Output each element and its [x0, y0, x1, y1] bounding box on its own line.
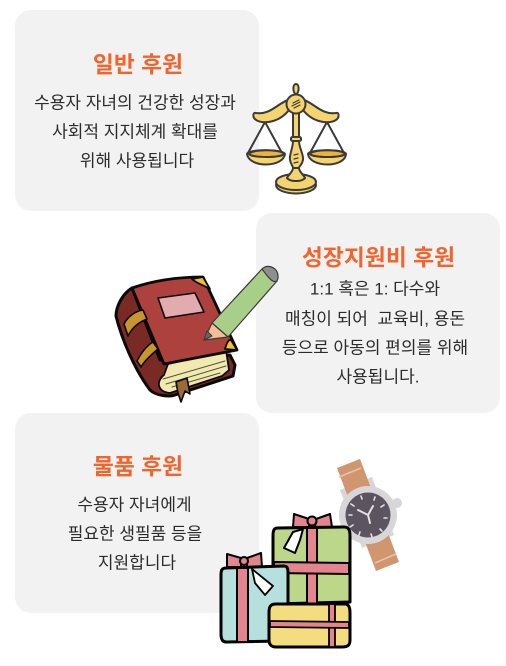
green gift box [273, 514, 350, 604]
book pages [159, 350, 229, 393]
icon: red book with pencil [116, 266, 278, 402]
text block: growth support description: 1:1 혹은 1: 다수와 [310, 280, 440, 298]
panel: goods support [15, 413, 259, 613]
icon: balance scale [247, 84, 346, 194]
heading: growth support: 성장지원비 후원 [302, 245, 455, 271]
pencil [212, 269, 277, 337]
text block: growth support description [282, 280, 468, 386]
text block: growth support description: 매칭이 되어 교육비, 용돈 [285, 310, 465, 328]
text block: goods support description [68, 496, 202, 572]
spine bands [124, 310, 147, 336]
text block: goods support description: 지원합니다 [98, 554, 176, 572]
bookmark [176, 378, 190, 402]
blue gift box [221, 553, 288, 642]
heading: general support: 일반 후원 [93, 52, 183, 78]
icon: gift boxes [221, 514, 350, 647]
text block: growth support description: 사용됩니다. [337, 368, 419, 386]
text block: goods support description: 수용자 자녀에게 [77, 496, 192, 514]
yellow gift box [269, 604, 350, 647]
text block: general support description: 사회적 지지체계 확대를 [52, 122, 218, 142]
cover label [158, 293, 204, 318]
icon: wristwatch [337, 459, 402, 571]
gold corners [192, 277, 210, 289]
text block: goods support description: 필요한 생필품 등을 [68, 524, 202, 544]
text block: growth support description: 등으로 아동의 편의를 위해 [282, 338, 468, 358]
book cover [132, 277, 237, 364]
text block: general support description: 위해 사용됩니다 [80, 152, 194, 170]
panel: growth support [256, 213, 500, 413]
panel: general support [15, 10, 259, 211]
text block: general support description: 수용자 자녀의 건강한 성장과 [34, 94, 236, 112]
book back cover [116, 288, 235, 396]
heading: goods support: 물품 후원 [93, 454, 183, 480]
text block: general support description [34, 94, 236, 170]
